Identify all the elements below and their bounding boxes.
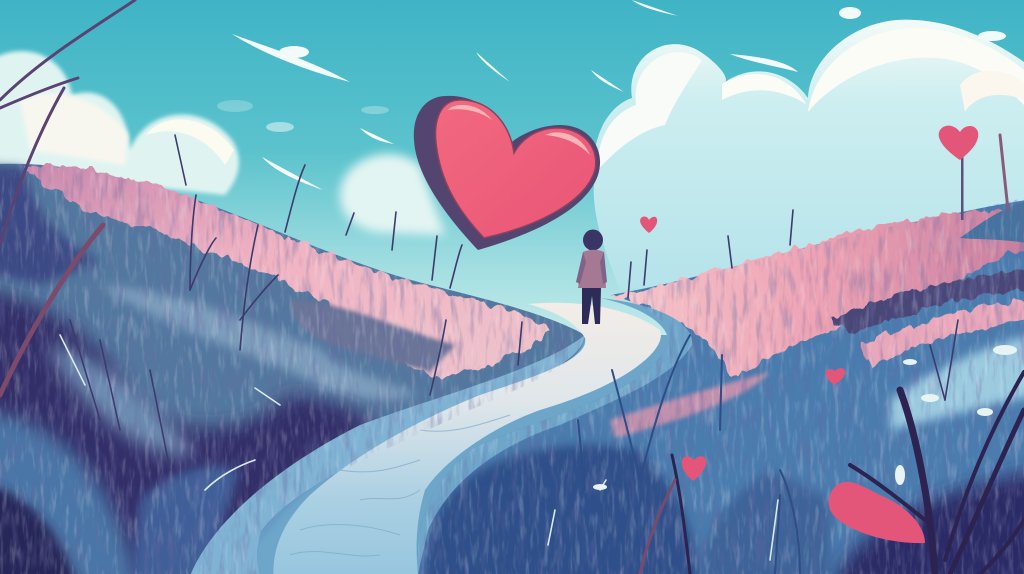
pale rim beside path (417, 298, 692, 574)
pale blue mid slope (100, 285, 420, 400)
balloon heart on stem (939, 126, 978, 220)
dark purple hollow (0, 290, 380, 574)
pale bank beside path (185, 335, 585, 574)
person standing on path (576, 230, 607, 324)
dark lower slope (424, 445, 700, 574)
grass texture over the hills (0, 164, 1024, 574)
pink streak on lower slope (610, 372, 770, 438)
right hill (410, 198, 1024, 574)
white petals (593, 345, 1017, 490)
left hill (0, 164, 585, 574)
ground base beneath the path (150, 335, 750, 574)
grey hollow (290, 300, 455, 372)
heart face (436, 100, 596, 238)
blue-grey slope (45, 345, 195, 455)
large floating heart (414, 96, 600, 250)
pink meadow on left hill (25, 165, 552, 378)
clouds: left bank (0, 51, 445, 235)
heart side (414, 96, 600, 250)
dark rim at far left (0, 165, 100, 285)
pale blue meadow (890, 332, 1024, 430)
lower pink band (860, 298, 1024, 368)
pink meadow on right hill (610, 211, 1024, 378)
sky (0, 0, 1024, 340)
small hearts (640, 126, 978, 543)
dark streak band (830, 268, 1024, 335)
wisps in the sky (217, 0, 1006, 190)
clouds: right bank (594, 20, 1024, 290)
winding path (273, 303, 661, 574)
